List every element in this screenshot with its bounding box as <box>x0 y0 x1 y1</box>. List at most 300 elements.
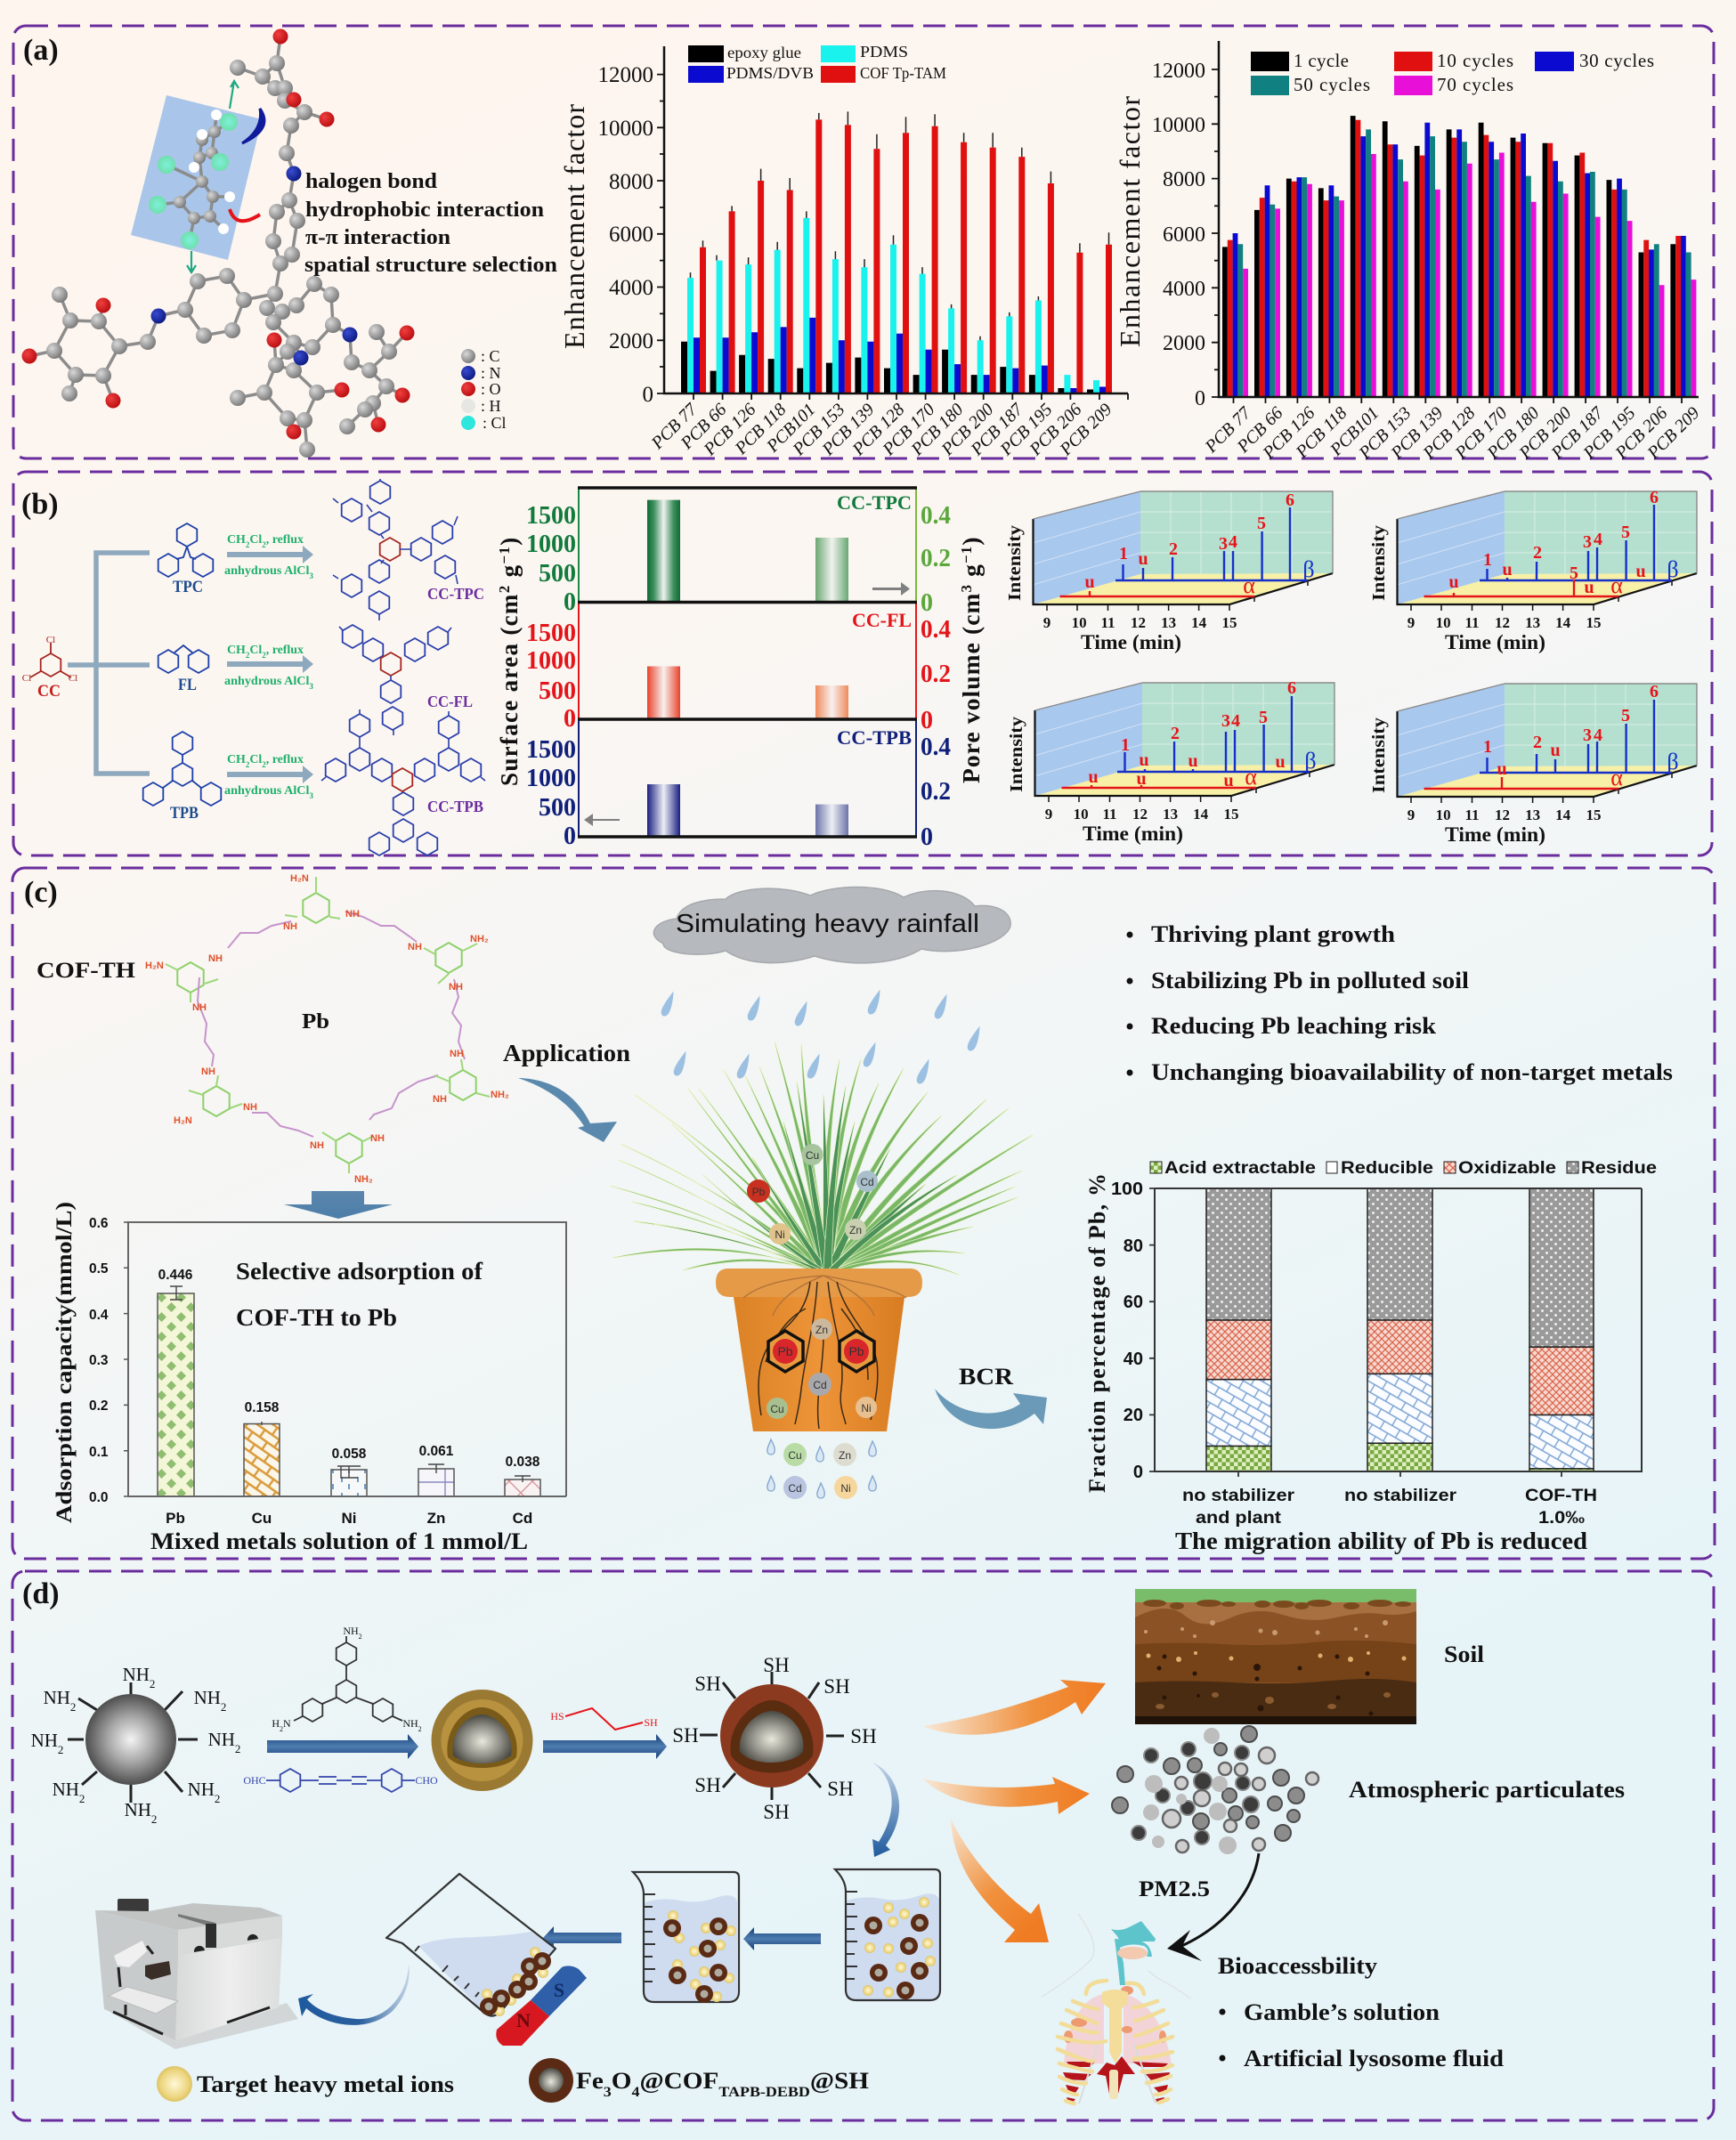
chromatogram 1: u <box>1084 572 1095 592</box>
chromatogram 4: Time (min) <box>1445 823 1545 846</box>
rain drops <box>660 988 984 1085</box>
chromatogram 4: 9 <box>1407 807 1415 823</box>
COF-TH ring structure: NH <box>208 953 223 964</box>
amino sphere: NH2 <box>123 1664 155 1690</box>
grass leaves <box>610 1042 1033 1275</box>
left tick labels: 0 <box>564 588 576 616</box>
interaction labels: spatial structure selection <box>304 254 557 277</box>
interaction labels <box>304 170 557 277</box>
metal badges: Cd <box>860 1176 874 1188</box>
DEBD monomer: OHC <box>243 1774 266 1787</box>
molecule model: COF with PCB on blue plane <box>21 28 415 458</box>
stacked bar chart: Pb fractions <box>1084 1159 1657 1554</box>
curved arrow: application <box>518 1078 617 1142</box>
right tick labels: 0.2 <box>921 545 951 572</box>
left tick labels: 500 <box>539 560 576 588</box>
legend: 50 cycles <box>1294 74 1370 95</box>
heading: (b): (b) <box>21 488 59 521</box>
metal badges: Zn <box>839 1449 851 1462</box>
legend: target ions and magnetic COF: Target heavy metal ions <box>197 2071 454 2097</box>
value labels <box>158 1268 540 1470</box>
legend: 10 cycles <box>1437 50 1513 71</box>
chromatogram 2: u <box>1502 560 1513 580</box>
benefit bullets <box>1127 921 1673 1085</box>
benefit bullets: Reducing Pb leaching risk <box>1151 1013 1437 1039</box>
COF-TH label: COF-TH <box>37 959 136 983</box>
PM2.5 label: PM2.5 <box>1139 1877 1210 1901</box>
CC monomer <box>22 635 77 701</box>
chromatogram 2: α <box>1610 572 1623 598</box>
panel: (c) COF-TH soil stabilization <box>12 868 1715 1559</box>
value labels: 0.061 <box>419 1444 454 1459</box>
chromatogram 2: β <box>1667 556 1679 582</box>
left tick labels: 1000 <box>526 765 576 792</box>
value labels: 0.158 <box>245 1400 280 1415</box>
value labels: 0.058 <box>332 1447 367 1462</box>
legend: COF Tp-TAM <box>860 64 946 82</box>
amino sphere: NH2 <box>44 1687 76 1713</box>
x tick labels: PCB 126 <box>1259 403 1319 464</box>
DEBD monomer: CHO <box>415 1774 438 1787</box>
magnet: S <box>554 1979 564 2001</box>
potted grass plant <box>610 1042 1033 1499</box>
thiol functional sphere: SH <box>694 1673 721 1695</box>
chromatogram 3: 1 <box>1121 735 1130 755</box>
bar 2 <box>1367 1188 1432 1471</box>
value labels: 0.038 <box>506 1455 540 1470</box>
y axis title: Adsorption capacity(mmol/L) <box>53 1202 77 1523</box>
right tick labels: 0 <box>921 823 933 851</box>
chromatogram 3: 3 <box>1221 711 1230 731</box>
y tick labels <box>598 63 653 407</box>
y tick labels: 12000 <box>1152 60 1205 83</box>
legend: target ions and magnetic COF <box>157 2058 869 2103</box>
bar chart: selective adsorption <box>53 1202 566 1554</box>
COF-TH ring structure: NH <box>243 1102 257 1113</box>
Soil label: Soil <box>1444 1641 1484 1667</box>
y tick labels: 10000 <box>1152 114 1205 137</box>
metal badges: Cd <box>813 1379 827 1391</box>
chromatogram 3: u <box>1088 767 1099 787</box>
category labels: Cd <box>513 1510 532 1527</box>
magnet: N <box>516 2009 531 2031</box>
CC-TPC structure <box>333 479 484 620</box>
x tick labels <box>1201 402 1704 464</box>
reaction arrows: anhydrous AlCl3 <box>224 784 314 800</box>
chromatogram 4: 11 <box>1464 807 1480 823</box>
metal badges: Cu <box>788 1449 802 1462</box>
chromatogram 2: 10 <box>1432 614 1451 631</box>
chromatogram 1: Time (min) <box>1081 631 1181 653</box>
chromatogram 2: u <box>1635 562 1646 581</box>
y ticks: 20 <box>1124 1406 1143 1425</box>
chromatogram 4: 5 <box>1621 706 1630 725</box>
TAPB monomer: H2N <box>272 1717 291 1732</box>
panel: (b) CC based polymers and chromatograms <box>13 472 1712 855</box>
chromatogram 4: 12 <box>1495 807 1510 823</box>
chromatogram 3: 2 <box>1171 724 1180 743</box>
x tick labels: PCB 180 <box>907 400 968 460</box>
COF-TH ring structure: NH <box>345 909 360 920</box>
x tick labels: PCB 77 <box>647 399 702 454</box>
x tick labels: PCB 195 <box>1579 403 1640 464</box>
COF-TH ring structure: NH <box>433 1094 447 1105</box>
chromatogram 4: β <box>1667 749 1679 774</box>
CC-FL structure <box>339 625 473 735</box>
metal badges: Ni <box>861 1402 872 1415</box>
chromatogram 1: 6 <box>1286 490 1294 510</box>
y ticks <box>1111 1179 1143 1482</box>
chromatogram 1: u <box>1138 549 1148 569</box>
bars <box>681 111 1112 393</box>
sample labels: CC-TPC <box>837 491 912 514</box>
chromatogram 2: 5 <box>1621 523 1630 542</box>
chromatogram 2: u <box>1584 578 1594 597</box>
chromatogram 1: α <box>1243 572 1255 598</box>
ICP instrument <box>95 1899 298 2049</box>
chromatogram 3: u <box>1136 769 1147 789</box>
x tick labels: PCB 200 <box>1515 403 1576 464</box>
chromatogram 2: 1 <box>1483 550 1492 570</box>
beaker with adsorption <box>633 1872 739 2003</box>
thiol functional sphere: SH <box>827 1778 854 1800</box>
chromatogram 1 <box>1005 490 1333 653</box>
chromatogram 2: 13 <box>1525 614 1540 631</box>
chromatogram 4: u <box>1497 759 1507 779</box>
amino sphere: NH2 <box>125 1799 157 1825</box>
left tick labels: 0 <box>564 705 576 733</box>
category labels: and plant <box>1196 1509 1282 1528</box>
legend: Residue <box>1581 1159 1657 1178</box>
y ticks: 80 <box>1124 1236 1143 1256</box>
chart annotation <box>236 1258 483 1331</box>
COF-TH ring structure: NH₂ <box>354 1174 373 1185</box>
atom legend: : C <box>481 347 500 365</box>
legend <box>1150 1159 1657 1178</box>
bar chart: enhancement factor by coating <box>558 43 1128 460</box>
chromatogram 1: 10 <box>1067 614 1087 631</box>
chromatogram 3: Intensity <box>1007 717 1026 792</box>
heading: (a): (a) <box>23 34 59 67</box>
reaction arrows <box>224 533 314 800</box>
CC-FL structure: CC-FL <box>427 693 473 710</box>
category labels: Pb <box>166 1510 185 1527</box>
arrow: beaker to beaker <box>743 1927 821 1950</box>
y ticks: 100 <box>1111 1179 1143 1199</box>
y tick labels: 0.2 <box>89 1398 109 1414</box>
curved arrow: to sample <box>872 1763 899 1857</box>
legend: target ions and magnetic COF: Fe3O4@COF TAPB-DEBD @SH <box>576 2068 869 2099</box>
y tick labels: 4000 <box>1163 278 1205 301</box>
thiol functional sphere <box>672 1654 877 1823</box>
chromatogram 4: 15 <box>1586 807 1601 823</box>
right tick labels: 0.2 <box>921 778 951 806</box>
monomers TPC FL TPB: TPB <box>170 804 199 823</box>
category labels: 1.0‰ <box>1538 1509 1585 1528</box>
y tick labels: 2000 <box>1163 332 1205 355</box>
down arrow <box>284 1191 393 1219</box>
category labels: Cu <box>252 1510 272 1527</box>
CC-TPB structure <box>321 709 485 855</box>
right tick labels: 0.4 <box>921 734 951 761</box>
COF-TH ring structure: NH <box>192 1002 207 1013</box>
right tick labels <box>921 502 951 851</box>
amino sphere: NH2 <box>31 1730 63 1755</box>
COF-TH ring structure: H₂N <box>290 873 309 884</box>
chromatogram 2: u <box>1448 572 1459 592</box>
COF-TH ring structure: H₂N <box>145 961 164 971</box>
category labels: no stabilizer <box>1182 1487 1295 1505</box>
legend: Acid extractable <box>1164 1159 1316 1178</box>
x tick labels: PCB 118 <box>731 400 791 459</box>
chromatogram 1: Intensity <box>1005 525 1025 601</box>
COF-TH ring structure: NH <box>449 982 463 993</box>
legend: 30 cycles <box>1579 50 1654 71</box>
left tick labels: 1500 <box>526 502 576 530</box>
BCR label: BCR <box>959 1364 1013 1390</box>
chromatogram 1: 5 <box>1257 514 1266 533</box>
chromatogram 2: 2 <box>1533 543 1542 563</box>
monomers TPC FL TPB: FL <box>178 676 197 694</box>
magnet <box>496 1966 587 2046</box>
chromatogram 1: 2 <box>1169 539 1178 559</box>
metal badges: Zn <box>815 1324 828 1336</box>
x tick labels: PCB 187 <box>967 399 1027 460</box>
metal badges <box>747 1144 878 1499</box>
category labels: Ni <box>342 1510 356 1527</box>
chromatogram 3: 15 <box>1223 806 1239 823</box>
core-shell sphere <box>431 1690 532 1791</box>
ethanedithiol: SH <box>644 1716 658 1729</box>
chromatogram 4: α <box>1610 765 1623 790</box>
direction arrows <box>584 582 910 826</box>
chromatogram 3: u <box>1188 751 1198 771</box>
y tick labels: 0.3 <box>89 1353 109 1368</box>
thiol functional sphere: SH <box>823 1675 850 1698</box>
atom legend: : H <box>481 397 501 415</box>
category labels: no stabilizer <box>1344 1487 1457 1505</box>
chromatogram 4: 14 <box>1555 807 1571 823</box>
x tick labels: PCB 200 <box>937 400 998 460</box>
chromatogram 3: u <box>1223 771 1234 790</box>
atom legend: : Cl <box>483 414 507 432</box>
COF-TH ring structure: NH₂ <box>470 934 489 944</box>
interaction labels: halogen bond <box>305 170 438 193</box>
chromatogram 1: 9 <box>1043 614 1051 631</box>
interaction labels: hydrophobic interaction <box>305 199 544 222</box>
arrow: to magnetic separation <box>543 1926 621 1950</box>
chromatogram 1: 1 <box>1119 544 1128 563</box>
metal badges: Ni <box>775 1228 785 1241</box>
orange arrows to applications <box>922 1680 1106 1942</box>
y ticks: 40 <box>1124 1350 1143 1369</box>
chromatogram 3: u <box>1139 750 1149 770</box>
y tick labels: 10000 <box>598 117 653 141</box>
amino sphere: NH2 <box>194 1687 226 1713</box>
y ticks: 60 <box>1124 1293 1143 1312</box>
respiratory system illustration <box>1042 1914 1190 2104</box>
legend: PDMS <box>860 43 908 61</box>
curved arrow: BCR <box>935 1389 1047 1429</box>
x tick labels: PCB 153 <box>789 400 849 460</box>
y axis title: Enhancement factor <box>1114 96 1146 347</box>
y tick labels: 0.5 <box>89 1261 109 1277</box>
DEBD monomer <box>243 1769 438 1792</box>
x tick labels: PCB 118 <box>1292 403 1351 463</box>
branching connector <box>68 553 150 774</box>
PM2.5 particles <box>1112 1726 1318 1854</box>
thiol functional sphere: SH <box>763 1654 790 1676</box>
y axis title: Fraction percentage of Pb, % <box>1084 1173 1110 1493</box>
left tick labels: 500 <box>539 677 576 705</box>
bar chart: surface area and pore volume <box>495 488 985 851</box>
chromatogram 1: 3 <box>1219 534 1228 554</box>
chromatogram 4: 3 <box>1583 725 1592 745</box>
category labels: COF-TH <box>1525 1487 1597 1505</box>
x tick labels: PCB 66 <box>677 400 731 454</box>
left tick labels: 1000 <box>526 647 576 675</box>
legend: 70 cycles <box>1437 74 1513 95</box>
amino sphere: NH2 <box>53 1779 85 1805</box>
x tick labels: PCB 128 <box>848 400 909 460</box>
x tick labels: PCB 128 <box>1419 403 1480 464</box>
chromatogram 2: 6 <box>1650 488 1659 507</box>
bar 1 <box>1206 1188 1271 1471</box>
chart annotation: Selective adsorption of <box>236 1258 483 1285</box>
CC monomer: CC <box>37 682 61 701</box>
arrow: thiol modification <box>543 1734 667 1759</box>
right tick labels: 0 <box>921 589 933 617</box>
amino sphere: NH2 <box>208 1729 240 1755</box>
chromatogram 3: Time (min) <box>1083 823 1183 845</box>
chromatogram 3: 6 <box>1287 678 1296 698</box>
benefit bullets: Stabilizing Pb in polluted soil <box>1151 968 1469 993</box>
x tick labels: PCB101 <box>762 400 820 457</box>
bar 3 <box>1529 1188 1594 1471</box>
chromatogram 3: 11 <box>1102 806 1117 823</box>
COF-TH ring structure: NH₂ <box>491 1090 509 1100</box>
metal badges: Zn <box>849 1224 862 1236</box>
chromatogram 4: 10 <box>1432 807 1451 823</box>
chromatogram 3: 9 <box>1045 806 1052 823</box>
legend: PDMS/DVB <box>726 64 814 82</box>
benefit bullets: Thriving plant growth <box>1151 921 1396 947</box>
chromatogram 3: 12 <box>1132 806 1148 823</box>
right tick labels: 0.4 <box>921 616 951 644</box>
bars <box>1222 116 1696 397</box>
monomers TPC FL TPB <box>143 523 221 823</box>
x tick labels: PCB 77 <box>1201 402 1255 458</box>
chromatogram 4: u <box>1550 741 1561 760</box>
y tick labels: 12000 <box>598 63 653 87</box>
thiol functional sphere: SH <box>672 1724 699 1747</box>
x tick labels <box>647 399 1116 460</box>
synthesis scheme <box>22 479 485 855</box>
CC-TPB structure: CC-TPB <box>427 798 483 815</box>
Atmospheric particulates label: Atmospheric particulates <box>1349 1777 1625 1803</box>
chromatogram 3: β <box>1304 748 1317 774</box>
COF-TH ring structure: H₂N <box>174 1115 192 1126</box>
y axis title: Enhancement factor <box>558 104 590 349</box>
category labels: Zn <box>427 1510 445 1527</box>
metal badges: Pb <box>777 1344 793 1358</box>
y tick labels: 0.0 <box>89 1490 109 1505</box>
amino sphere: NH2 <box>188 1779 220 1805</box>
bioaccessibility text: Artificial lysosome fluid <box>1244 2046 1505 2071</box>
chromatogram 2: 11 <box>1464 614 1480 631</box>
arrow: COF growth <box>267 1734 418 1759</box>
y tick labels <box>89 1216 109 1505</box>
right tick labels: 0.2 <box>921 661 951 688</box>
legend: 1 cycle <box>1294 50 1349 71</box>
atom legend <box>461 347 507 432</box>
chromatogram 1: β <box>1302 556 1315 582</box>
x tick labels: PCB 139 <box>818 400 879 460</box>
right tick labels: 0 <box>921 707 933 734</box>
COF-TH ring structure: NH <box>450 1049 464 1059</box>
y tick labels: 0.4 <box>89 1308 109 1323</box>
left tick labels: 500 <box>539 794 576 822</box>
metal badges: Ni <box>840 1482 851 1495</box>
thiol functional sphere: SH <box>694 1774 721 1796</box>
metal badges: Cd <box>788 1482 802 1495</box>
chromatogram 4: 6 <box>1650 682 1659 701</box>
legend: Oxidizable <box>1458 1159 1556 1178</box>
y ticks: 0 <box>1133 1463 1143 1482</box>
chromatogram 4: 2 <box>1533 733 1542 752</box>
chart annotation: COF-TH to Pb <box>236 1304 397 1331</box>
y tick labels: 8000 <box>1163 168 1205 191</box>
sample labels: CC-FL <box>852 609 912 631</box>
chromatogram 3: u <box>1275 752 1286 772</box>
beaker with sample <box>835 1869 940 2000</box>
chromatogram 4: 13 <box>1525 807 1540 823</box>
y tick labels: 6000 <box>609 223 653 247</box>
y tick labels: 0.6 <box>89 1216 109 1231</box>
right axis title: Pore volume (cm3 g−1) <box>957 536 985 783</box>
metal badges: Pb <box>848 1344 864 1358</box>
chromatogram 2: 12 <box>1495 614 1510 631</box>
x axis title: Mixed metals solution of 1 mmol/L <box>150 1528 528 1554</box>
x tick labels: PCB 170 <box>879 400 939 460</box>
x tick labels: PCB 170 <box>1451 403 1512 464</box>
soil block <box>1135 1589 1416 1724</box>
CC monomer: Cl <box>46 635 55 645</box>
chromatogram 4 <box>1369 682 1697 846</box>
black arrow to lungs <box>1167 1853 1259 1961</box>
curved arrow: to instrument <box>298 1964 410 2025</box>
chromatogram 4: 4 <box>1594 725 1602 745</box>
COF-TH ring structure: NH <box>370 1133 385 1144</box>
x tick labels: PCB 139 <box>1387 403 1448 464</box>
y tick labels: 0 <box>1195 387 1205 410</box>
panel: (d) Fe3O4@COF workflow <box>12 1571 1714 2120</box>
cloud: Simulating heavy rainfall <box>676 910 979 938</box>
chromatogram 3: 4 <box>1231 711 1240 731</box>
chromatogram 3: 13 <box>1163 806 1178 823</box>
y tick labels: 8000 <box>609 170 653 194</box>
left tick labels <box>526 502 576 850</box>
category labels <box>166 1510 532 1527</box>
chromatogram 2: 9 <box>1407 614 1415 631</box>
reaction arrows: CH2Cl2, reflux <box>227 753 304 769</box>
x tick labels: PCB 153 <box>1355 403 1416 464</box>
left tick labels: 1500 <box>526 620 576 647</box>
COF-TH ring structure: NH <box>310 1140 324 1151</box>
chromatogram 1: 13 <box>1161 614 1176 631</box>
y tick labels: 0.1 <box>89 1445 109 1460</box>
x tick labels: PCB101 <box>1326 403 1383 460</box>
